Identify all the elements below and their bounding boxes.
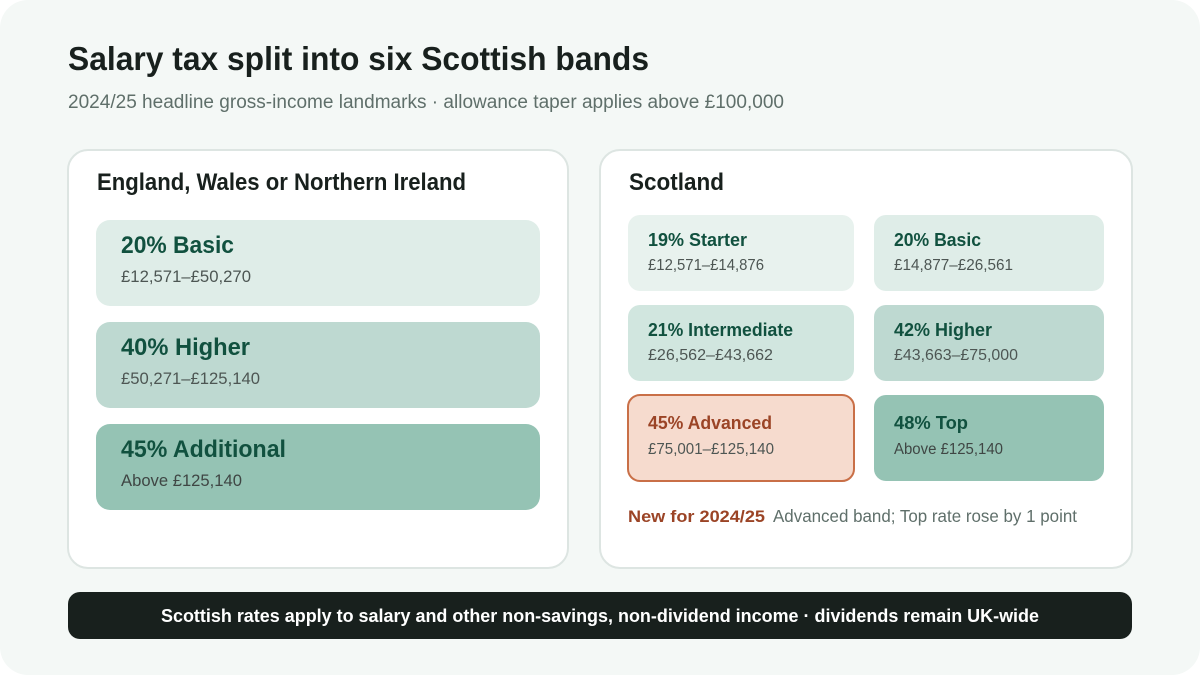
band: 45% Additional: Above £125,140: [121, 471, 242, 490]
subtitle: 2024/25 headline gross-income landmarks · allowance taper applies above £100,000: [68, 92, 784, 113]
band: 20% Basic: [874, 215, 1104, 291]
band: 19% Starter: [628, 215, 854, 291]
panel heading: England, Wales or Northern Ireland: [97, 169, 466, 196]
band: 20% Basic: [96, 220, 540, 306]
band: 19% Starter: 19% Starter: [648, 230, 747, 250]
band: 40% Higher: £50,271–£125,140: [121, 369, 260, 388]
band: 48% Top: [874, 395, 1104, 481]
band: 45% Advanced (new): [628, 395, 854, 481]
band: 20% Basic: £12,571–£50,270: [121, 267, 251, 286]
band: 48% Top: Above £125,140: [894, 441, 1003, 458]
band: 20% Basic: £14,877–£26,561: [894, 257, 1013, 274]
band: 21% Intermediate: [628, 305, 854, 381]
band: 45% Additional: [96, 424, 540, 510]
band: 19% Starter: £12,571–£14,876: [648, 257, 764, 274]
band: 45% Advanced (new): £75,001–£125,140: [648, 441, 774, 458]
band: 42% Higher: £43,663–£75,000: [894, 347, 1018, 364]
band: 21% Intermediate: 21% Intermediate: [648, 320, 793, 340]
note: new for 2024/25: Advanced band; Top rate rose by 1 point: [773, 506, 1077, 526]
title: Salary tax split into six Scottish bands: [68, 40, 649, 77]
panel heading: Scotland: [629, 169, 724, 196]
band: 45% Additional: 45% Additional: [121, 436, 286, 463]
band: 20% Basic: 20% Basic: [894, 230, 981, 250]
panel: Scotland: [600, 150, 1132, 568]
band: 21% Intermediate: £26,562–£43,662: [648, 347, 773, 364]
band: 20% Basic: 20% Basic: [121, 232, 234, 259]
note: new for 2024/25: New for 2024/25: [628, 507, 765, 526]
band: 42% Higher: 42% Higher: [894, 320, 992, 340]
band: 40% Higher: [96, 322, 540, 408]
footer banner: [68, 592, 1132, 639]
band: 48% Top: 48% Top: [894, 413, 968, 433]
note: new for 2024/25: [628, 506, 1077, 526]
band: 45% Advanced (new): 45% Advanced: [648, 413, 772, 433]
panel: England, Wales or Northern Ireland: [68, 150, 568, 568]
footer banner: Scottish rates apply to salary and other non-savings, non-dividend income · dividends remain UK-wide: [161, 606, 1039, 626]
band: 40% Higher: 40% Higher: [121, 334, 250, 361]
band: 42% Higher: [874, 305, 1104, 381]
